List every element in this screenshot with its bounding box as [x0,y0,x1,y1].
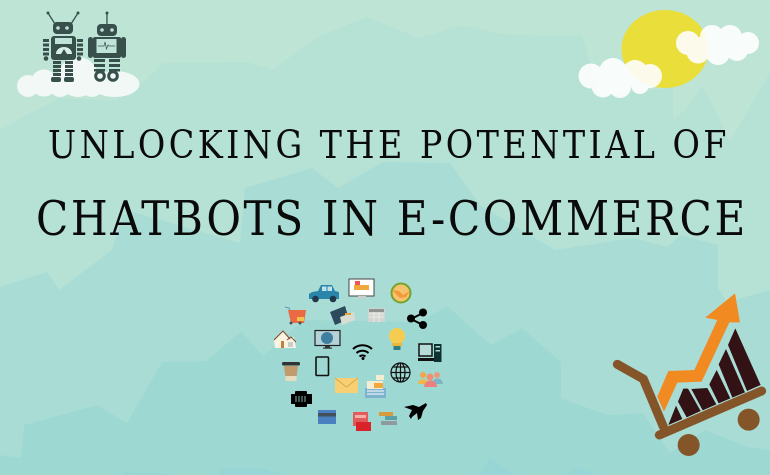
cloud left [578,58,662,98]
icon: people group [418,372,443,387]
growth arrow [657,293,740,412]
icon: house [274,331,296,348]
cart wheels [678,434,700,456]
icon: calculator [368,308,385,322]
icon: car [309,285,339,302]
icon: handshake [392,284,410,302]
title line 2: CHATBOTS IN E-COMMERCE [36,190,745,247]
icon: robots on cloud [17,12,140,97]
icon: globe [391,363,410,382]
icon: monitor with chart [349,279,374,298]
title line 1: UNLOCKING THE POTENTIAL OF [48,124,726,168]
icon: monitor with brain [315,330,340,349]
icon: airplane [404,403,427,420]
cart frame [617,364,762,435]
icon: cash register [365,375,386,398]
robot right [88,12,126,80]
icon: envelope [335,378,358,393]
icon: credit cards [330,306,355,325]
icon: sun and clouds [578,10,759,98]
cloud right [676,25,759,65]
icon: fax machine [291,391,312,407]
icon: shopping cart with rising chart [617,293,762,456]
icon: desktop computer [418,344,442,362]
sun [622,10,708,88]
icon: wallet card [318,410,336,424]
icon: shopping cart [285,307,306,324]
icon: share [407,308,427,329]
icon: light bulb [389,328,405,350]
icon: tablet [316,357,328,376]
chart bars [668,328,761,425]
icon: stacked books [379,412,397,425]
icon: red printer [353,412,371,431]
icon cluster: e-commerce icons [274,279,443,431]
icon: wifi [353,345,372,360]
icon: coffee cup [282,362,300,381]
robot left [43,12,83,82]
cloud under robots [17,57,140,97]
